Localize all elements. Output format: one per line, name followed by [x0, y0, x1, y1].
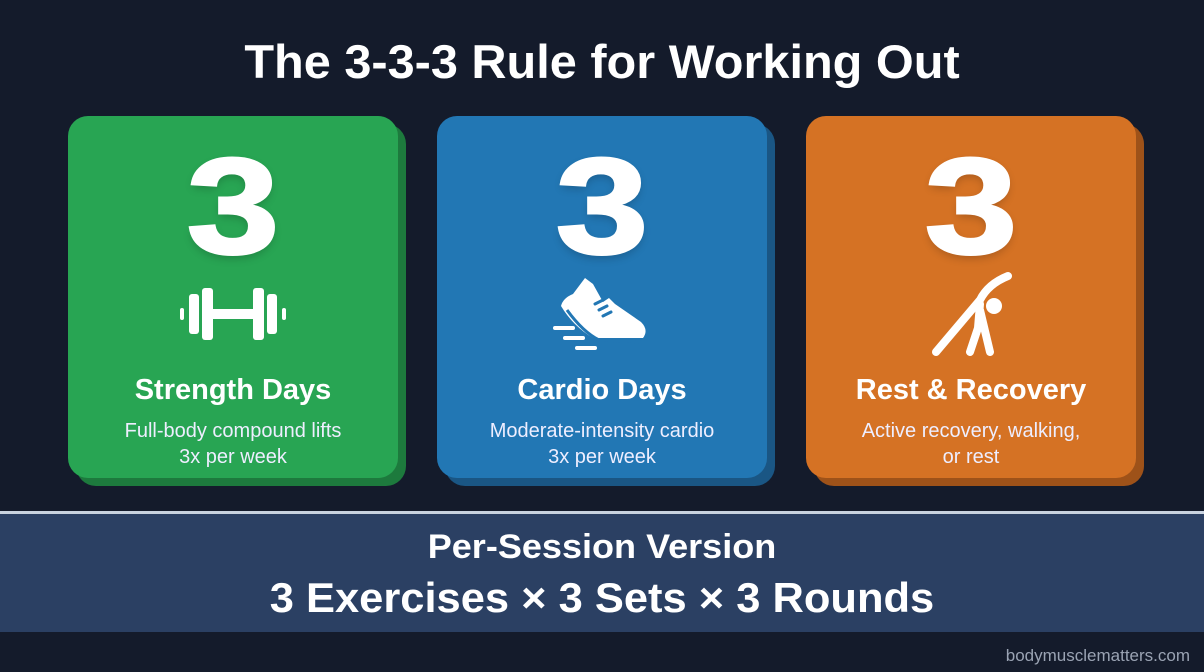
icon: running shoe [553, 278, 646, 350]
band formula: 3 Exercises × 3 Sets × 3 Rounds [270, 574, 934, 621]
panel: rest [806, 116, 1136, 478]
panel: cardio: Cardio Days [517, 374, 687, 406]
panel: rest: 3 [925, 130, 1017, 282]
panel: strength: Strength Days [135, 374, 331, 406]
panel: strength [68, 116, 398, 478]
panel: cardio: 3x per week [548, 446, 656, 468]
band subtitle: Per-Session Version [428, 528, 776, 566]
icon: stretching figure [932, 272, 1012, 356]
panel: rest: Rest & Recovery [856, 374, 1086, 406]
panel: rest: or rest [943, 446, 999, 468]
panel: cardio: 3 [556, 130, 648, 282]
panel: strength: Full-body compound lifts [125, 420, 341, 442]
panel: cardio: Moderate-intensity cardio [490, 420, 714, 442]
watermark: bodymusclematters.com [1006, 646, 1190, 665]
panel: strength: 3 [187, 130, 279, 282]
bottom band [0, 511, 1204, 632]
title: The 3-3-3 Rule for Working Out [244, 35, 960, 88]
panel: strength: 3x per week [179, 446, 287, 468]
panel: rest: Active recovery, walking, [862, 420, 1080, 442]
icon: dumbbell [180, 288, 286, 340]
panel: cardio [437, 116, 767, 478]
